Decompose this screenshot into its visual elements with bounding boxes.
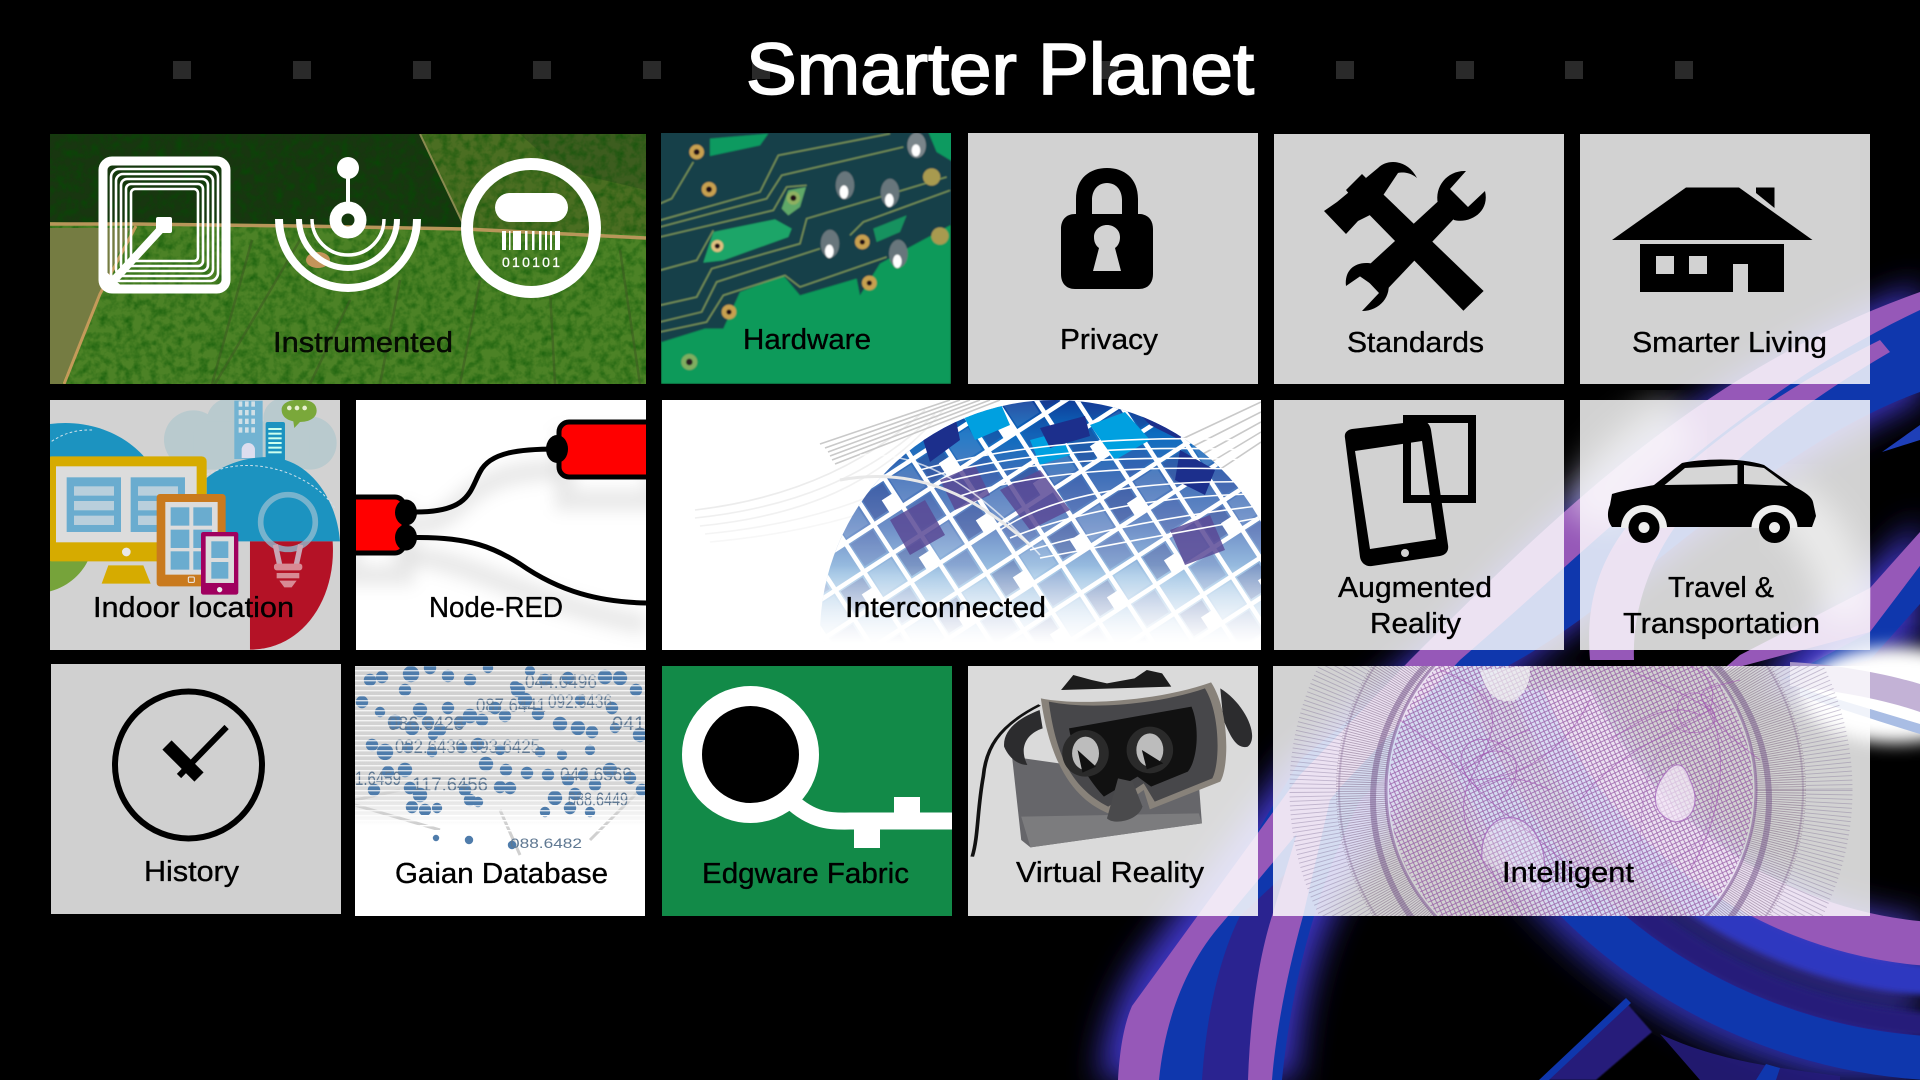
label: Intelligent [1502, 857, 1634, 889]
globe of tiles [820, 400, 1261, 636]
grey wave lines [695, 400, 1261, 542]
white arcs across the globe [840, 439, 1258, 558]
network scatter graphic: 092.6436 [548, 692, 612, 713]
node-red flow diagram [340, 422, 669, 603]
icon: barcode in a circle: 010101 [502, 254, 560, 270]
panel: Hardware [660, 132, 953, 384]
rings at lower right [1473, 690, 1920, 1080]
circuit board photo [660, 132, 953, 384]
label: Virtual Reality [1016, 857, 1205, 889]
panel: Virtual Reality [968, 666, 1258, 916]
panel: Travel and Transportation [1580, 400, 1870, 650]
network scatter graphic [355, 663, 647, 861]
logo: ring and tail [692, 696, 960, 848]
panel: History [51, 664, 341, 914]
panel: Standards [1274, 134, 1564, 384]
panel: Interconnected [662, 398, 1290, 658]
label: History [144, 856, 240, 888]
network scatter graphic: 087.6441 [476, 696, 546, 717]
label: Gaian Database [395, 858, 608, 890]
network scatter graphic: 088.6449 [568, 790, 628, 811]
label: Interconnected [845, 592, 1046, 624]
panel: Gaian Database [355, 663, 647, 916]
icon: barcode in a circle [467, 164, 595, 292]
label: Privacy [1060, 324, 1159, 356]
panel: Augmented Reality [1274, 400, 1564, 650]
icon: RFID tag [103, 161, 226, 289]
label: Transportation [1623, 608, 1820, 640]
icon: car [1608, 460, 1816, 543]
network scatter graphic: 088.6482 [510, 835, 582, 851]
panel: Intelligent [1273, 666, 1870, 916]
title: Smarter Planet [746, 30, 1254, 110]
label: Standards [1347, 327, 1484, 359]
label: Indoor location [93, 592, 294, 624]
icon: sensor with waves [279, 157, 417, 288]
network scatter graphic: 042.6569 [560, 765, 632, 786]
label: Edgware Fabric [702, 858, 909, 890]
left arcs rising diagonally [1118, 292, 1920, 1080]
background: black with blue and purple swirl [1078, 267, 1920, 1080]
label: Instrumented [273, 327, 453, 359]
label: Smarter Living [1632, 327, 1827, 359]
wire shadows [350, 440, 655, 625]
decorative squares row behind the title [173, 61, 1693, 79]
label [1338, 572, 1492, 640]
aerial field photo [50, 134, 646, 384]
panel: Privacy [968, 133, 1258, 384]
label: Reality [1370, 608, 1461, 640]
network scatter graphic: 044.6496 [525, 672, 597, 693]
photo: VR headset [972, 670, 1252, 857]
panel: Indoor location [47, 398, 340, 650]
icon: house [1612, 188, 1812, 292]
icon: phone and AR frame [1345, 419, 1472, 566]
label: Augmented [1338, 572, 1492, 604]
label: Node-RED [429, 592, 563, 624]
network scatter graphic: 086.6428 [388, 714, 464, 735]
panel: Instrumented [50, 134, 646, 384]
navy wedge and blue line at the bottom [1539, 998, 1840, 1080]
icon: padlock [1061, 168, 1153, 289]
panel: Edgware Fabric [662, 666, 960, 916]
network scatter graphic: 117.6456 [412, 775, 488, 796]
globe fade to white [820, 570, 1261, 650]
icon: clock [115, 692, 262, 838]
guilloche spirograph pattern [1290, 666, 1852, 916]
network scatter graphic: 082.6430 [395, 737, 465, 758]
network scatter graphic: 093.6425 [470, 737, 540, 758]
label: Hardware [743, 324, 871, 356]
network scatter graphic: 1.6459 [355, 769, 401, 790]
pale glow rings at right edge [1590, 420, 1920, 743]
icon: hammer and wrench [1324, 162, 1486, 311]
illustration: cloud city and devices [47, 398, 340, 650]
label: Travel & [1668, 572, 1774, 604]
panel: Node-RED [356, 400, 646, 650]
panel: Smarter Living [1580, 134, 1870, 384]
label [1623, 572, 1820, 640]
network scatter graphic: 041 [612, 714, 645, 735]
